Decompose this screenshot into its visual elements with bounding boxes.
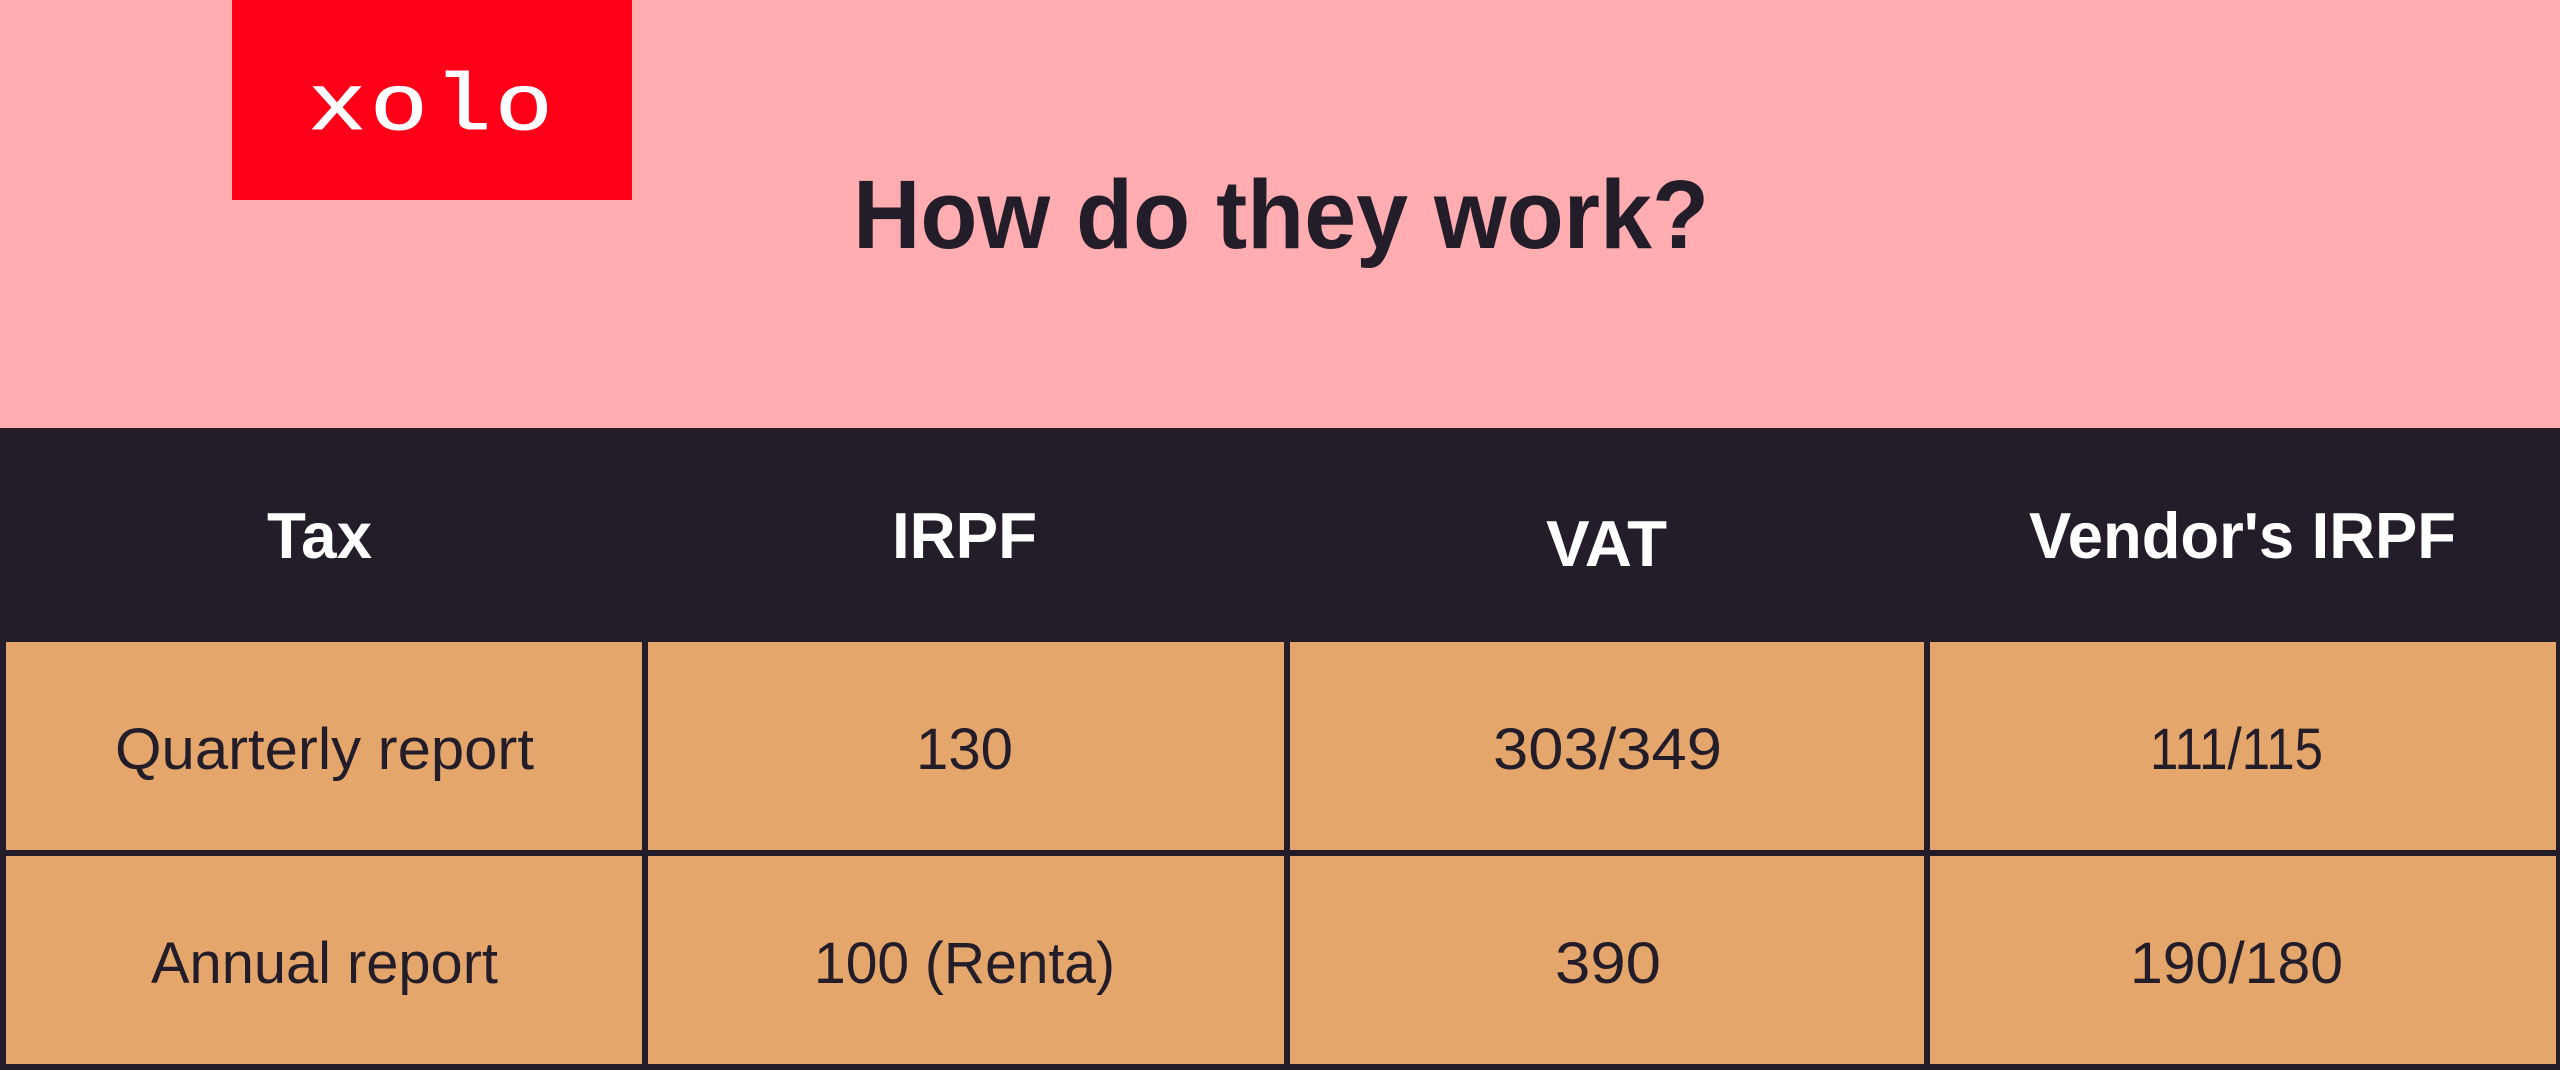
cell: 303/349	[1290, 642, 1924, 850]
row: Annual report	[6, 856, 2556, 1064]
cell: 111/115	[1930, 642, 2556, 850]
column header: IRPF: IRPF	[892, 499, 1037, 572]
cell: Quarterly report	[6, 642, 642, 850]
logo: xolo	[232, 0, 632, 200]
cell: 190/180	[1930, 856, 2556, 1064]
cell: 130	[648, 642, 1284, 850]
cell: Annual report	[6, 856, 642, 1064]
cell: Quarterly report: Quarterly report	[115, 717, 534, 782]
table header row	[0, 428, 2560, 642]
cell: 390	[1290, 856, 1924, 1064]
table body background and grid	[0, 642, 2560, 1070]
column header: VAT: VAT	[1546, 507, 1667, 580]
cell: 100 (Renta)	[648, 856, 1284, 1064]
row: Quarterly report	[6, 642, 2556, 850]
cell: 100 (Renta): 100 (Renta)	[814, 931, 1115, 996]
column header: Vendor's IRPF: Vendor's IRPF	[2029, 499, 2456, 572]
column header: Tax: Tax	[267, 499, 372, 572]
cell: Annual report: Annual report	[151, 931, 498, 996]
pink header background	[0, 0, 2560, 428]
cell: 390: 390	[1555, 931, 1661, 996]
logo: xolo: xolo	[308, 62, 553, 153]
title: How do they work?	[853, 160, 1709, 269]
table	[0, 428, 2560, 1070]
cell: 130: 130	[916, 717, 1013, 782]
cell: 303/349: 303/349	[1493, 717, 1722, 782]
cell: 111/115: 111/115	[2150, 717, 2323, 782]
cell: 190/180: 190/180	[2130, 931, 2343, 996]
